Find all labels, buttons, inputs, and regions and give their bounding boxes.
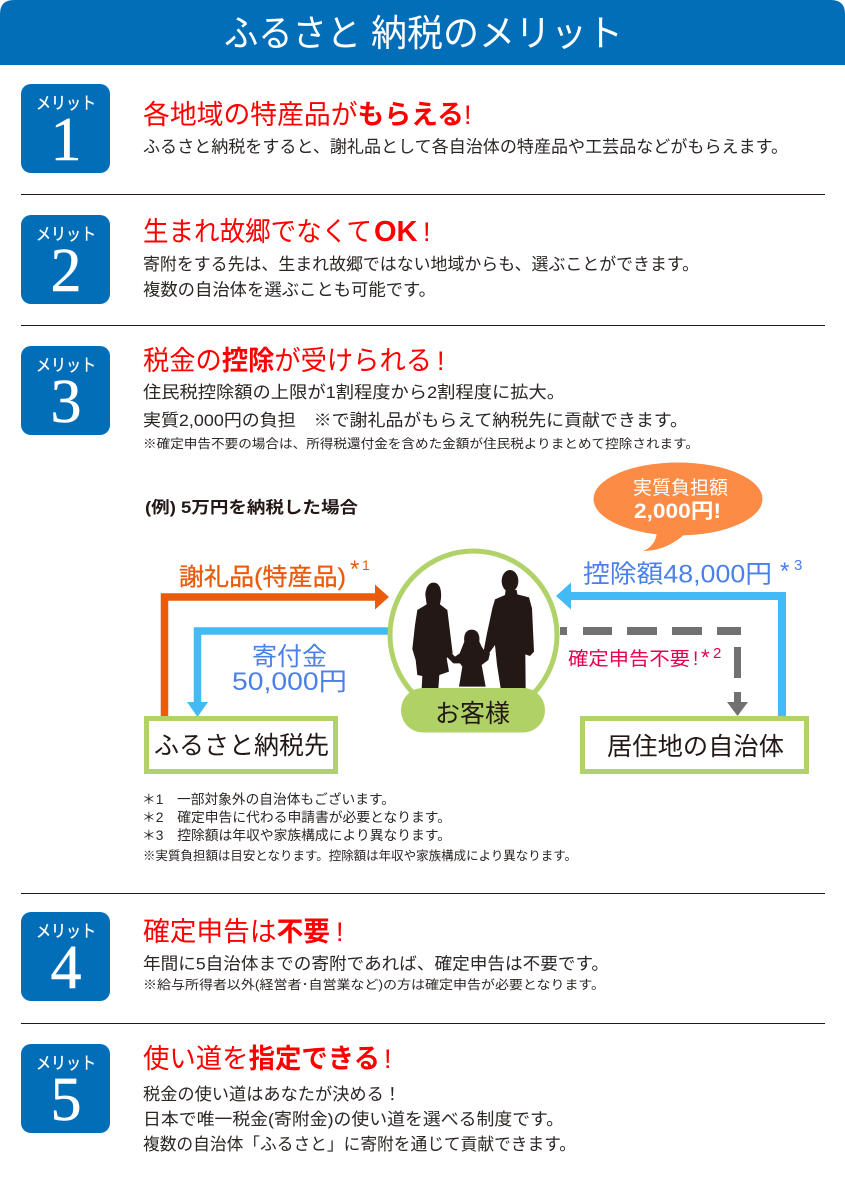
badge: merit 4: [21, 912, 110, 1002]
heading: merit 5: 使い道を指定できる: [143, 1044, 380, 1074]
body: merit 2: 複数の自治体を選ぶことも可能です。: [143, 280, 436, 300]
label: donation: [232, 643, 347, 696]
merit 5: [21, 1044, 576, 1154]
badge: merit 3: [21, 346, 110, 436]
badge: merit 5: メリット: [36, 1054, 96, 1073]
heading: merit 2: 生まれ故郷でなくて: [143, 217, 372, 247]
heading: merit 4: !: [336, 917, 344, 947]
label: no tax return needed: 2: [713, 645, 721, 662]
label: gift: *: [350, 556, 359, 583]
heading: merit 5: !: [384, 1044, 392, 1074]
merit 4: [21, 912, 609, 1002]
label: gift: 1: [362, 557, 370, 573]
callout: effective cost: [594, 462, 762, 551]
badge: merit 4: 4: [50, 934, 82, 1002]
box: hometown tax destination: ふるさと納税先: [154, 732, 329, 760]
label: deduction: *: [780, 558, 789, 585]
body: merit 2: 寄附をする先は、生まれ故郷ではない地域からも、選ぶことができます。: [143, 255, 699, 274]
body: merit 3: 実質2,000円の負担 ※で謝礼品がもらえて納税先に貢献できます。: [143, 411, 688, 430]
body: merit 4: [143, 954, 609, 992]
heading: merit 3: !: [437, 346, 445, 376]
merit 1: [21, 84, 788, 174]
heading: merit 4: 確定申告は不要: [143, 917, 330, 947]
label: deduction: 控除額48,000円: [583, 560, 772, 588]
badge: merit 1: 1: [50, 106, 82, 174]
label: gift: [179, 556, 370, 591]
box: hometown tax destination: [146, 718, 336, 772]
box: resident municipality: 居住地の自治体: [607, 733, 784, 761]
badge: merit 1: メリット: [36, 94, 96, 113]
label: no tax return needed: [568, 645, 721, 670]
merit 2: [21, 215, 699, 305]
callout: effective cost: 実質負担額: [633, 477, 728, 499]
example diagram: [142, 462, 806, 863]
label: no tax return needed: *: [701, 645, 710, 670]
body: merit 5: 複数の自治体「ふるさと」に寄附を通じて貢献できます。: [143, 1135, 576, 1154]
arrow: dashed no tax return path: [560, 631, 748, 716]
body: merit 4: 年間に5自治体までの寄附であれば、確定申告は不要です。: [143, 954, 609, 974]
badge: merit 4: メリット: [36, 922, 96, 941]
body: merit 2: [143, 255, 699, 300]
body: merit 3: ※確定申告不要の場合は、所得税還付金を含めた金額が住民税よりまとめて控除されます。: [143, 436, 699, 451]
header banner: 納税のメリット: [371, 13, 623, 54]
label: gift: 謝礼品(特産品): [179, 564, 346, 591]
badge: merit 3: 3: [50, 368, 82, 436]
heading: merit 2: !: [423, 217, 431, 247]
badge: merit 3: メリット: [36, 356, 96, 375]
label: customer: お客様: [435, 700, 510, 728]
body: merit 5: 日本で唯一税金(寄附金)の使い道を選べる制度です。: [143, 1109, 564, 1129]
body: merit 1: ふるさと納税をすると、謝礼品として各自治体の特産品や工芸品などがもらえます。: [143, 138, 788, 156]
badge: merit 5: [21, 1044, 110, 1134]
footnotes: ※実質負担額は目安となります。控除額は年収や家族構成により異なります。: [143, 848, 577, 863]
footnotes: ＊2 確定申告に代わる申請書が必要となります。: [142, 810, 451, 825]
label: no tax return needed: !: [693, 649, 698, 670]
icon: family silhouette: [412, 570, 534, 688]
merit 3: [21, 346, 699, 451]
label: donation: 50,000円: [232, 668, 347, 696]
footnotes: ＊1 一部対象外の自治体もございます。: [142, 791, 395, 807]
footnotes: [142, 791, 577, 863]
label: donation: 寄付金: [252, 643, 327, 671]
header banner: [0, 0, 845, 65]
heading: merit 1: 各地域の特産品がもらえる: [143, 100, 464, 130]
box: resident municipality: [582, 718, 806, 772]
heading: merit 1: !: [464, 100, 472, 130]
arrow: deduction to customer: [556, 582, 782, 716]
heading: merit 3: 税金の控除が受けられる: [143, 346, 432, 376]
callout: effective cost: 2,000円!: [634, 500, 721, 523]
arrow: donation from customer to municipality: [187, 631, 392, 717]
badge: merit 2: 2: [50, 237, 82, 305]
heading: merit 2: OK: [374, 216, 418, 248]
badge: merit 5: 5: [50, 1066, 82, 1134]
label: deduction: 3: [794, 557, 802, 574]
body: merit 5: 税金の使い道はあなたが決める！: [143, 1084, 401, 1104]
body: merit 5: [143, 1084, 576, 1154]
header banner: ふるさと: [224, 13, 361, 54]
body: merit 3: [143, 383, 699, 451]
label: no tax return needed: 確定申告不要: [568, 648, 690, 670]
badge: merit 1: [21, 84, 110, 174]
badge: merit 2: [21, 215, 110, 305]
footnotes: ＊3 控除額は年収や家族構成により異なります。: [142, 828, 451, 843]
body: merit 4: ※給与所得者以外(経営者･自営業など)の方は確定申告が必要となります。: [143, 977, 605, 992]
label: customer: [401, 688, 545, 732]
arrow: gift from municipality to customer: [164, 584, 389, 716]
customer circle with family silhouette: [390, 551, 557, 719]
badge: merit 2: メリット: [36, 225, 96, 244]
example caption: (例) 5万円を納税した場合: [145, 498, 359, 517]
body: merit 3: 住民税控除額の上限が1割程度から2割程度に拡大。: [143, 383, 565, 402]
